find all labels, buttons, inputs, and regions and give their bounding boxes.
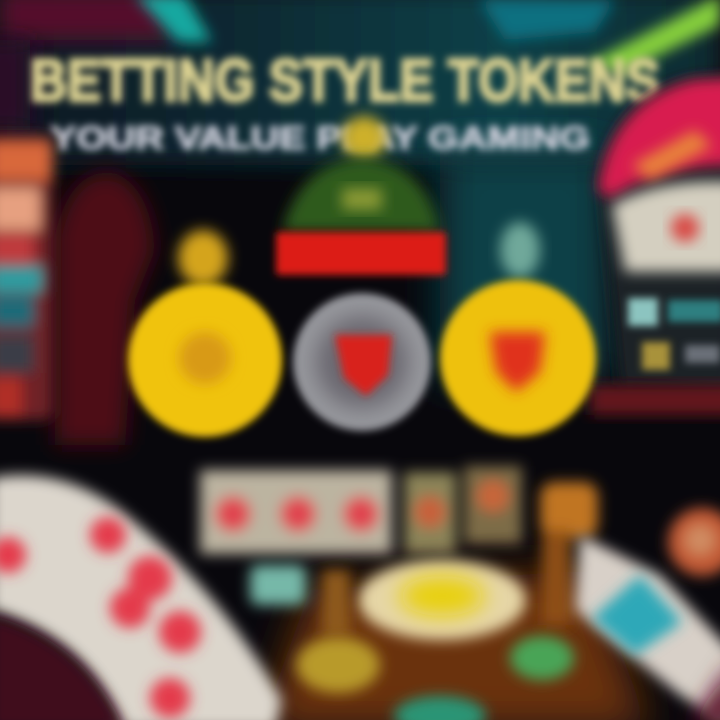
center green bell with red banner [276,158,446,275]
small yellow bowl [296,637,380,693]
bottom right dark red corner [690,660,720,720]
machine red base [590,385,720,415]
right orange round object [668,508,720,576]
machine red symbol [671,214,699,242]
row of cards [200,466,522,554]
wooden table [260,570,650,720]
chip red spots [0,517,201,718]
green bell [282,158,440,232]
large white chip [0,475,282,720]
medal cap [178,230,228,286]
right game machine [590,75,720,415]
medal disc [128,283,282,437]
medal cap [500,222,540,278]
green bowl [394,636,574,720]
machine buttons [628,298,720,370]
medal inner [316,316,408,408]
bell emblem [342,188,382,210]
subtitle: YOUR VALUE PLAY GAMING [50,120,590,156]
medal emblem [179,332,231,384]
medal disc [293,293,431,431]
machine body [600,75,720,390]
machine orange label [632,130,712,180]
yellow plate [358,560,526,640]
left dark red curtain [55,172,155,445]
machine red dome [598,78,720,198]
chip dark edge [0,615,125,720]
shield emblem [335,335,392,396]
left gold medal [128,230,282,437]
banner [276,232,446,275]
orange bottle [540,482,598,625]
light beams at top [135,0,720,72]
small teal tile [250,565,350,635]
chip body [0,475,282,720]
right white card with teal tile [575,535,720,720]
top small gold token [342,116,386,160]
left game machine [0,135,53,420]
shield emblem [490,332,545,392]
right yellow medal [440,222,596,436]
machine white panel [612,181,720,272]
centre silver medal [293,293,431,431]
medal disc [440,280,596,436]
